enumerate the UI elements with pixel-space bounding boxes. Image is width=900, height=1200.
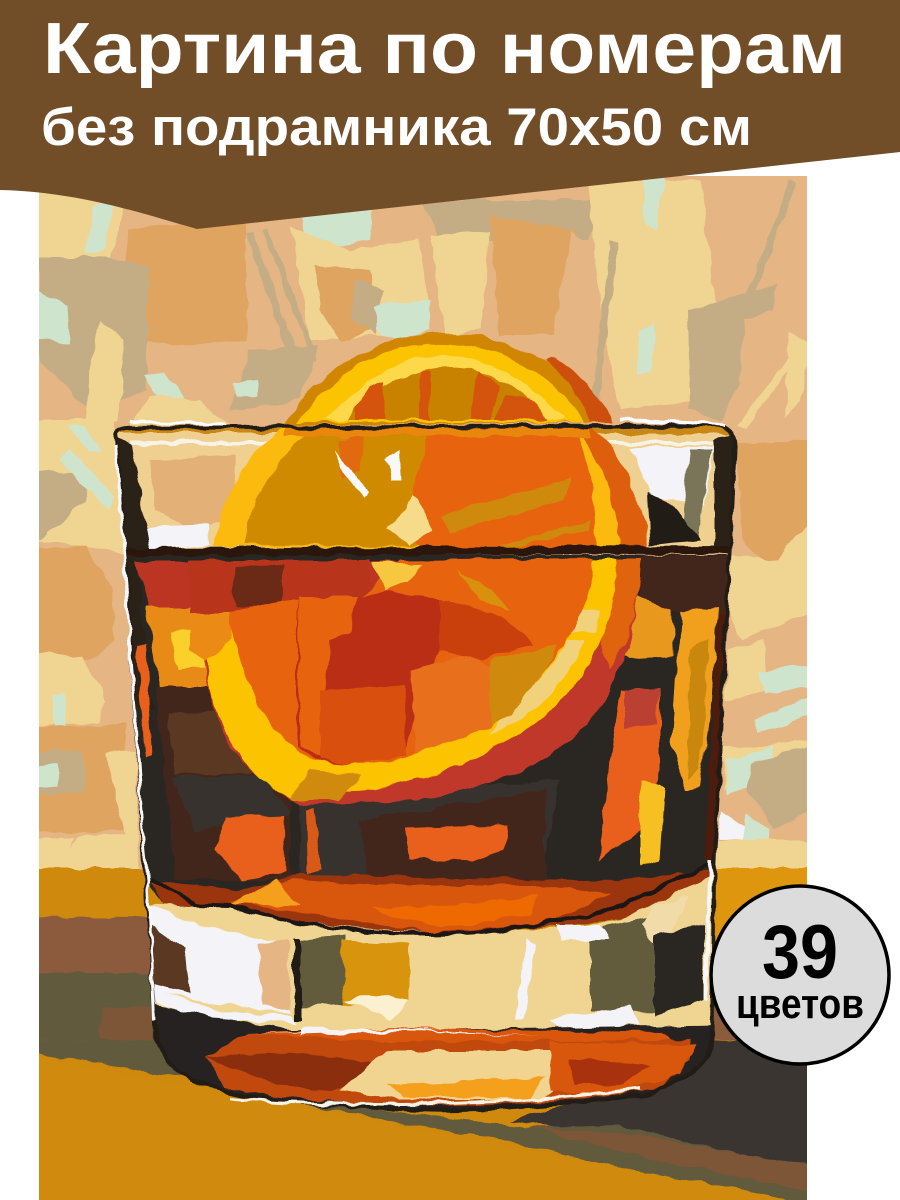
glass bottom <box>154 1004 711 1109</box>
base glass panels <box>150 875 712 1040</box>
liquid bottom edge <box>150 862 712 934</box>
waterline <box>125 550 728 552</box>
painting background: sunburst wall <box>20 160 830 880</box>
orange slice: back part above the rim <box>283 333 612 425</box>
painting: glass with orange slice <box>20 160 830 1200</box>
badge: 39 colours: цветов <box>736 980 864 1027</box>
orange slice: front part above the waterline <box>213 425 648 547</box>
heading: title: Картина по номерам <box>43 9 846 89</box>
heading: subtitle: без подрамника 70х50 см <box>41 98 752 157</box>
liquid <box>110 555 740 932</box>
glass body <box>110 425 740 1120</box>
orange slice: refracted part under the waterline <box>190 558 640 805</box>
header banner <box>0 0 900 229</box>
table surface <box>20 868 830 1200</box>
glass outline and highlights <box>116 420 735 1110</box>
upper empty glass <box>110 425 740 550</box>
badge: 39 colours: 39 <box>762 910 838 995</box>
badge: 39 colours <box>711 886 889 1064</box>
